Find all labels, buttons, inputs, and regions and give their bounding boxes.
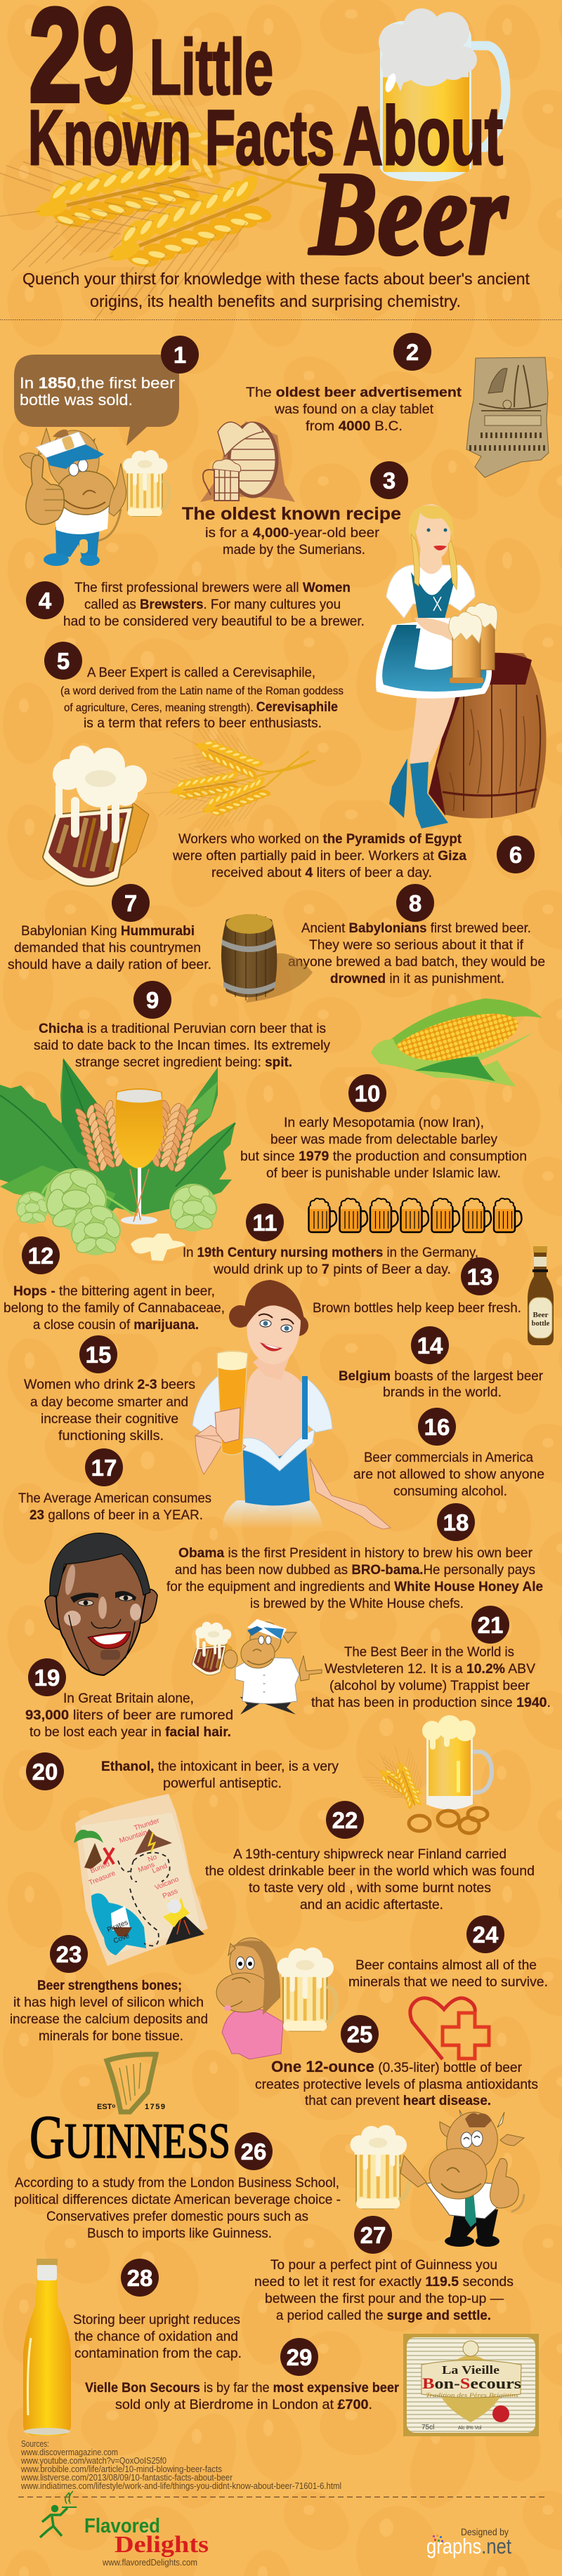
text: fact 24	[348, 1958, 548, 1990]
badge 14	[411, 1326, 449, 1364]
text: fact 18: for the equipment and ingredients and White House Honey Ale	[166, 1580, 543, 1594]
text: fact 10: but since 1979 the production and consumption	[240, 1149, 527, 1164]
badge 9	[133, 981, 171, 1019]
badge 24	[466, 1915, 504, 1953]
text: fact 14	[339, 1369, 544, 1400]
badge 19: 19	[34, 1665, 60, 1691]
text: fact 23: minerals for bone tissue.	[39, 2029, 183, 2044]
text: fact 13: Brown bottles help keep beer fresh.	[313, 1301, 521, 1316]
text: fact 9: Chicha is a traditional Peruvian corn beer that is	[39, 1022, 326, 1036]
icon: treasure map: Cove	[112, 1932, 131, 1946]
badge 7: 7	[124, 890, 137, 916]
badge 2: 2	[406, 339, 419, 365]
text: fact 14: brands in the world.	[383, 1385, 502, 1400]
badge 3	[370, 461, 408, 499]
title	[28, 0, 509, 279]
icon: beer spill	[131, 1234, 185, 1261]
text: fact 8: Ancient Babylonians first brewed beer.	[301, 921, 531, 936]
icon: golden beer bottle	[23, 2259, 71, 2436]
text: fact 22: and an acidic aftertaste.	[300, 1898, 443, 1913]
text: fact 12: belong to the family of Cannabaceae,	[4, 1301, 225, 1316]
text: fact 4: called as Brewsters. For many cultures you	[84, 597, 341, 612]
badge 27: 27	[360, 2222, 386, 2248]
text: fact 7	[8, 924, 211, 972]
text: fact 3: The oldest known recipe	[182, 504, 401, 524]
icon: treasure map: Treasure	[88, 1870, 117, 1887]
icon: brown beer bottle: bottle	[532, 1320, 550, 1328]
text: fact 5: A Beer Expert is called a Cerevisaphile,	[87, 666, 315, 680]
sources: www.discovermagazine.com	[20, 2448, 118, 2457]
logo: graphs.net: Designed by	[461, 2527, 509, 2537]
text: fact 9: strange secret ingredient being: spit.	[75, 1055, 292, 1070]
text: fact 17: The Average American consumes	[18, 1491, 211, 1506]
text: fact 10: In early Mesopotamia (now Iran),	[284, 1116, 484, 1130]
badge 15	[79, 1335, 117, 1373]
text: fact 20: powerful antiseptic.	[163, 1776, 282, 1791]
logo: Flavored Delights: Delights	[115, 2532, 209, 2558]
sources	[20, 2439, 341, 2491]
text: fact 9: said to date back to the Incan times. Its extremely	[34, 1038, 330, 1053]
text: fact 2: from 4000 B.C.	[306, 419, 403, 434]
intro text: origins, its health benefits and surprising chemistry.	[90, 292, 461, 310]
text: fact 8: anyone brewed a bad batch, they would be	[288, 955, 545, 970]
icon: title beer mug	[379, 8, 506, 182]
text: fact 23: increase the calcium deposits and	[10, 2012, 208, 2027]
badge 4: 4	[39, 588, 52, 614]
badge 29	[280, 2338, 318, 2376]
text: fact 26: political differences dictate American beverage choice -	[14, 2193, 341, 2207]
text: fact 29: sold only at Bierdrome in London at £700.	[115, 2398, 372, 2412]
text: fact 21: The Best Beer in the World is	[344, 1645, 514, 1660]
text: fact 15: a day become smarter and	[30, 1395, 188, 1410]
text: fact 20	[101, 1759, 339, 1791]
icon: corn cob	[371, 998, 542, 1087]
text: fact 5: (a word derived from the Latin name of the Roman goddess	[60, 685, 344, 697]
logo: Guinness: GUINNESS	[30, 2103, 230, 2172]
logo: Guinness: o	[112, 2103, 115, 2109]
icon: beer label La Vieille Bon-Secours: 75cl	[422, 2424, 434, 2431]
badge 11: 11	[253, 1210, 277, 1236]
badge 1: 1	[174, 342, 186, 368]
text: fact 19: In Great Britain alone,	[63, 1691, 194, 1706]
sources: www.brobible.com/life/article/10-mind-blowing-beer-facts	[20, 2464, 222, 2474]
icon: female cow in pink jacket	[216, 1938, 336, 2059]
icon: engraved barrel and mug	[200, 421, 295, 502]
text: fact 3: is for a 4,000-year-old beer	[205, 526, 380, 541]
badge 29: 29	[287, 2344, 312, 2370]
text: fact 2: was found on a clay tablet	[274, 402, 434, 417]
icon: tilted dark beer mug	[43, 746, 149, 886]
title: Little: Little	[150, 24, 273, 111]
icon: waiter cow pointing	[192, 1619, 322, 1715]
sources: Sources:	[21, 2439, 49, 2449]
text: fact 28	[73, 2313, 242, 2361]
badge 10	[348, 1074, 386, 1112]
logo: Flavored Delights: Flavored	[84, 2515, 160, 2537]
text: fact 18	[166, 1546, 543, 1611]
text: fact 7: demanded that his countrymen	[14, 941, 201, 956]
badge 14: 14	[417, 1333, 443, 1359]
icon: treasure map: Buried	[89, 1861, 111, 1875]
icon: clay tablet	[466, 357, 549, 477]
icon: wheat behind title	[0, 34, 341, 329]
badge 12	[22, 1236, 60, 1274]
badge 23: 23	[56, 1941, 81, 1967]
text: fact 27: a period called the surge and settle.	[276, 2309, 491, 2323]
badge 22: 22	[332, 1807, 358, 1833]
badge 8: 8	[409, 890, 422, 916]
logo: Flavored Delights: www.flavoredDelights.com	[102, 2557, 197, 2568]
intro text	[22, 270, 530, 310]
text: fact 18: is brewed by the White House chefs.	[250, 1597, 464, 1611]
icon: brunette woman with beer	[192, 1280, 391, 1529]
text: fact 23: Beer strengthens bones;	[37, 1979, 182, 1993]
text: fact 29: Vielle Bon Secours is by far the most expensive beer	[85, 2381, 400, 2396]
icon: beer label La Vieille Bon-Secours: Tradition des Pères Brigittins	[426, 2391, 519, 2398]
callout: speech bubble fact 1: bottle was sold.	[20, 391, 133, 409]
text: fact 5: of agriculture, Ceres, meaning strength). Cerevisaphile	[64, 700, 338, 715]
text: fact 28: contamination from the cap.	[74, 2346, 242, 2361]
text: fact 10: of beer is punishable under Islamic law.	[266, 1166, 501, 1181]
text: fact 7: Babylonian King Hummurabi	[21, 924, 195, 939]
text: fact 8	[288, 921, 545, 986]
badge 9: 9	[146, 987, 159, 1013]
badge 21	[471, 1606, 509, 1644]
badge 22	[326, 1801, 364, 1839]
text: fact 10	[240, 1116, 527, 1181]
icon: hops leaves with glass and barley	[0, 1058, 235, 1255]
icon: treasure map: Volcano	[154, 1875, 181, 1892]
text: fact 25: that can prevent heart disease.	[305, 2094, 491, 2108]
badge 8	[396, 884, 434, 922]
icon: small wooden barrel	[221, 914, 313, 1003]
badge 16	[418, 1408, 456, 1446]
text: fact 26: According to a study from the London Business School,	[15, 2176, 339, 2191]
badge 18: 18	[443, 1510, 469, 1535]
icon: treasure map: Mans	[137, 1861, 156, 1875]
badge 5: 5	[57, 648, 70, 674]
badge 16: 16	[424, 1414, 450, 1440]
callout: speech bubble fact 1: In 1850,the first beer	[20, 374, 175, 392]
intro text: Quench your thirst for knowledge with these facts about beer's ancient	[22, 270, 530, 288]
badge 17: 17	[91, 1455, 117, 1481]
text: fact 17	[18, 1491, 211, 1523]
text: fact 5: is a term that refers to beer enthusiasts.	[84, 716, 322, 731]
icon: cow with cap and beer	[20, 428, 169, 566]
icon: beer label La Vieille Bon-Secours: Alc 8% Vol	[458, 2426, 482, 2431]
text: fact 25	[255, 2058, 538, 2108]
title: Facts: Facts	[205, 95, 334, 181]
badge 2	[393, 333, 431, 371]
icon: beer label La Vieille Bon-Secours: Bon- Secours	[422, 2374, 522, 2392]
text: fact 15	[24, 1378, 195, 1444]
badge 19	[28, 1658, 66, 1696]
text: fact 10: beer was made from delectable barley	[270, 1132, 498, 1147]
text: fact 14: Belgium boasts of the largest beer	[339, 1369, 544, 1384]
sources: www.youtube.com/watch?v=QoxOoIS25f0	[20, 2456, 166, 2466]
icon: beer with wheat and pretzels	[357, 1715, 492, 1833]
text: fact 4: The first professional brewers were all Women	[74, 581, 351, 595]
text: fact 21: (alcohol by volume) Trappist beer	[329, 1679, 530, 1693]
badge 6: 6	[509, 842, 522, 868]
text: fact 19	[25, 1691, 233, 1740]
badge 15: 15	[86, 1342, 111, 1368]
text: fact 8: drowned in it as punishment.	[330, 972, 504, 986]
icon: treasure map: No	[147, 1854, 158, 1864]
badge 5	[44, 642, 82, 680]
title: Known: Known	[28, 95, 191, 181]
text: fact 11: would drink up to 7 pints of Beer a day.	[213, 1262, 451, 1277]
icon: Obama caricature	[45, 1533, 157, 1675]
badge 25: 25	[347, 2021, 372, 2047]
text: fact 22	[205, 1847, 535, 1913]
badge 27	[354, 2216, 392, 2254]
badge 1	[161, 336, 199, 374]
icon: treasure map: Thunder	[133, 1817, 161, 1832]
badge 20	[26, 1752, 64, 1790]
text: fact 21	[311, 1645, 551, 1710]
text: fact 15: increase their cognitive	[41, 1412, 178, 1427]
text: fact 27: need to let it rest for exactly 119.5 seconds	[254, 2275, 514, 2290]
text: fact 23	[10, 1979, 208, 2044]
text: fact 16: are not allowed to show anyone	[353, 1467, 544, 1482]
text: fact 26	[14, 2176, 341, 2241]
text: fact 22: A 19th-century shipwreck near Finland carried	[233, 1847, 507, 1862]
badge 4	[26, 581, 64, 619]
sources: www.listverse.com/2013/08/09/10-fantastic-facts-about-beer	[20, 2473, 233, 2483]
icon: wheat sprig	[142, 714, 315, 842]
badge 11	[246, 1203, 284, 1241]
text: fact 5	[60, 666, 344, 731]
text: fact 25: creates protective levels of plasma antioxidants	[255, 2078, 538, 2092]
badge 10: 10	[355, 1081, 380, 1107]
badge 23	[50, 1935, 88, 1973]
text: fact 6: were often partially paid in beer. Workers at Giza	[172, 849, 466, 864]
text: fact 2	[246, 385, 462, 434]
text: fact 7: should have a daily ration of beer.	[8, 958, 211, 972]
badge 28	[121, 2259, 159, 2297]
text: fact 11	[183, 1246, 478, 1277]
icon: running waiter	[40, 2491, 77, 2537]
text: fact 19: to be lost each year in facial hair.	[30, 1725, 231, 1740]
icon: treasure map: Land	[151, 1862, 169, 1875]
text: fact 24: Beer contains almost all of the	[355, 1958, 537, 1973]
badge 26: 26	[241, 2139, 266, 2165]
icon: treasure map: Pass	[162, 1887, 179, 1901]
text: fact 23: it has high level of silicon which	[13, 1995, 204, 2010]
logo: graphs.net: graphs.net	[426, 2534, 511, 2558]
text: fact 6	[172, 832, 466, 880]
badge 7	[112, 884, 150, 922]
text: fact 22: to taste very old , with some burnt notes	[249, 1881, 491, 1896]
icon: beer label La Vieille Bon-Secours	[403, 2334, 539, 2436]
text: fact 18: Obama is the first President in history to brew his own beer	[178, 1546, 533, 1561]
logo: Guinness: 1759	[145, 2103, 165, 2111]
text: fact 27	[254, 2258, 514, 2323]
text: fact 8: They were so serious about it that if	[309, 938, 524, 953]
badge 28: 28	[127, 2265, 152, 2291]
icon: treasure map: Mountain	[119, 1829, 148, 1845]
badge 21: 21	[478, 1612, 503, 1638]
text: fact 17: 23 gallons of beer in a YEAR.	[30, 1508, 203, 1523]
text: fact 24: minerals that we need to survive.	[348, 1975, 548, 1990]
text: fact 27: To pour a perfect pint of Guinness you	[270, 2258, 497, 2273]
text: fact 6: Workers who worked on the Pyramids of Egypt	[178, 832, 462, 847]
text: fact 12: Hops - the bittering agent in beer,	[13, 1284, 215, 1299]
text: fact 21: that has been in production since 1940.	[311, 1696, 551, 1710]
text: fact 26: Conservatives prefer domestic pours such as	[46, 2210, 308, 2224]
text: fact 4	[63, 581, 365, 629]
callout: speech bubble fact 1	[14, 355, 179, 446]
icon: heart with medical cross	[410, 1998, 489, 2059]
text: fact 9	[34, 1022, 330, 1070]
text: fact 16	[353, 1451, 544, 1499]
text: fact 12	[4, 1284, 225, 1333]
badge 3: 3	[383, 468, 396, 494]
logo: Flavored Delights	[40, 2491, 209, 2568]
text: fact 29	[85, 2381, 400, 2412]
text: fact 19: 93,000 liters of beer are rumored	[25, 1708, 233, 1723]
text: fact 11: In 19th Century nursing mothers in the Germany,	[183, 1246, 478, 1260]
badge 20: 20	[32, 1759, 58, 1785]
icon: businessman cow with beer	[351, 2107, 524, 2247]
text: fact 28: the chance of oxidation and	[74, 2330, 238, 2344]
badge 13: 13	[467, 1264, 492, 1290]
icon: beer label La Vieille Bon-Secours: La Vieille	[442, 2363, 500, 2377]
text: fact 18: and has been now dubbed as BRO-bama.He personally pays	[175, 1563, 535, 1578]
text: fact 28: Storing beer upright reduces	[73, 2313, 240, 2327]
text: fact 15: Women who drink 2-3 beers	[24, 1378, 195, 1392]
badge 24: 24	[473, 1922, 499, 1948]
icon: brown beer bottle	[528, 1246, 554, 1345]
logo: Guinness	[30, 2054, 230, 2172]
text: fact 3: made by the Sumerians.	[223, 543, 365, 557]
text: fact 12: a close cousin of marijuana.	[33, 1318, 199, 1333]
badge 6	[497, 835, 535, 873]
icon: treasure map	[74, 1794, 208, 1966]
text: fact 15: functioning skills.	[58, 1429, 164, 1444]
icon: seven pint mugs	[309, 1198, 521, 1232]
text: fact 4: had to be considered very beautiful to be a brewer.	[63, 614, 365, 629]
badge 25	[341, 2015, 379, 2053]
sources: www.indiatimes.com/lifestyle/work-and-life/things-you-didnt-know-about-beer-71601-6.html	[20, 2481, 341, 2491]
badge 17	[85, 1448, 123, 1486]
text: fact 22: the oldest drinkable beer in the world which was found	[205, 1864, 535, 1879]
text: fact 3	[182, 504, 401, 557]
text: fact 16: Beer commercials in America	[364, 1451, 533, 1465]
icon: big wooden barrel	[437, 653, 547, 819]
badge 13	[461, 1257, 499, 1295]
title: Beer script: Beer	[308, 147, 509, 279]
badge 26	[235, 2132, 273, 2170]
text: fact 26: Busch to imports like Guinness.	[87, 2226, 272, 2241]
text: fact 2: The oldest beer advertisement	[246, 385, 462, 400]
badge 18	[437, 1503, 475, 1541]
logo: Guinness: EST	[97, 2103, 112, 2111]
icon: harp	[107, 2054, 156, 2112]
icon: brown beer bottle: Beer	[533, 1311, 549, 1319]
text: fact 21: Westvleteren 12. It is a 10.2% ABV	[325, 1662, 535, 1677]
icon: blonde maid with two mugs	[376, 504, 497, 828]
text: fact 6: received about 4 liters of beer a day.	[211, 866, 432, 880]
text: fact 27: between the first pour and the top-up —	[265, 2292, 504, 2306]
icon: treasure map: Pirates	[106, 1919, 129, 1934]
badge 12: 12	[28, 1243, 53, 1269]
text: fact 20: Ethanol, the intoxicant in beer, is a very	[101, 1759, 339, 1774]
text: fact 16: consuming alcohol.	[393, 1484, 507, 1499]
text: fact 25: One 12-ounce (0.35-liter) bottle of beer	[271, 2058, 523, 2075]
